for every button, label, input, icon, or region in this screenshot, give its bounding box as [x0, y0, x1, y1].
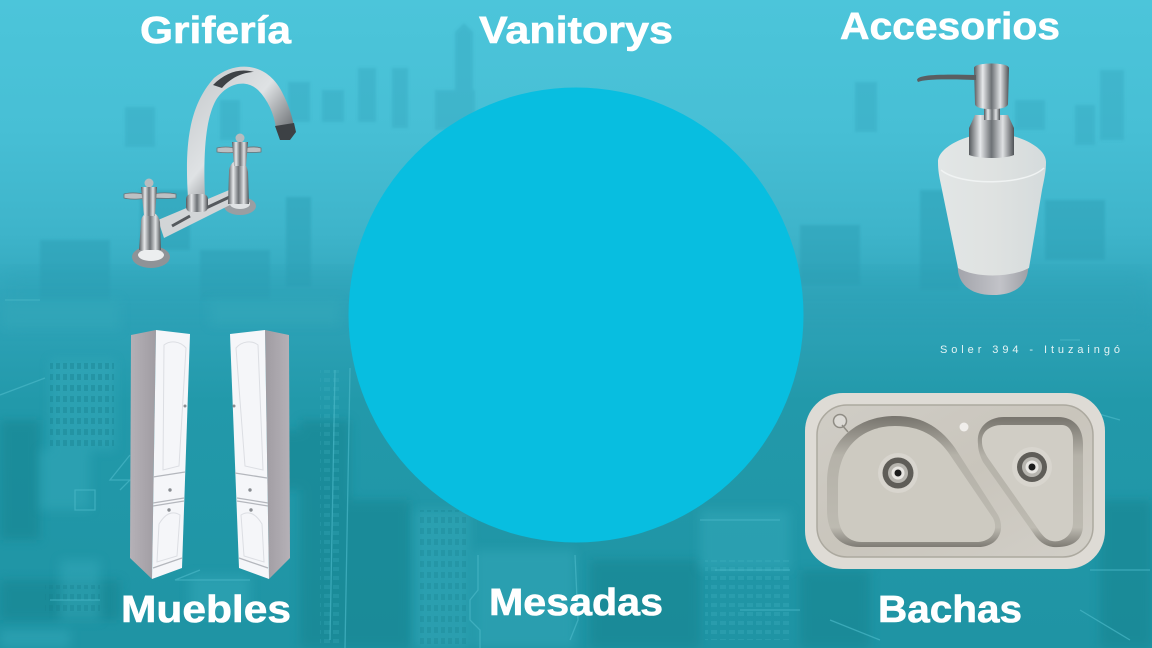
pump head — [974, 64, 1009, 109]
right valve base — [224, 197, 256, 215]
small basin — [978, 417, 1083, 547]
title: Bachas: Bachas — [878, 589, 1022, 631]
overflow — [834, 414, 846, 428]
chrome base — [958, 262, 1028, 295]
collar — [969, 115, 1014, 158]
left cabinet — [130, 330, 190, 579]
building outlines — [0, 300, 1150, 648]
right cabinet — [230, 330, 290, 579]
drains — [878, 453, 918, 493]
connecting bar — [158, 188, 240, 238]
middle skyline — [40, 190, 1105, 300]
tap hole — [960, 422, 968, 432]
title: Vanitorys: Vanitorys — [479, 10, 673, 52]
nozzle — [917, 75, 976, 82]
large basin — [827, 416, 1001, 547]
central circle — [348, 88, 804, 542]
spout — [187, 67, 294, 198]
title: Accesorios: Accesorios — [840, 6, 1060, 48]
right valve — [228, 160, 249, 204]
ceramic body — [938, 133, 1046, 276]
city blocks, light — [0, 300, 790, 648]
icon: two tall cabinets — [130, 330, 290, 579]
icon: soap dispenser — [917, 64, 1046, 295]
haze band of lower city — [0, 270, 1152, 330]
left valve — [132, 246, 170, 268]
windows — [50, 360, 114, 446]
far skyline — [125, 23, 1124, 147]
address text: Soler 394 - Ituzaingó — [940, 344, 1120, 356]
title: Mesadas: Mesadas — [489, 582, 663, 624]
city blocks, dark — [0, 420, 1152, 648]
icon: double sink — [805, 393, 1105, 569]
title: Muebles: Muebles — [121, 589, 291, 631]
icon: faucet — [124, 67, 296, 268]
title: Grifería: Grifería — [140, 10, 292, 52]
